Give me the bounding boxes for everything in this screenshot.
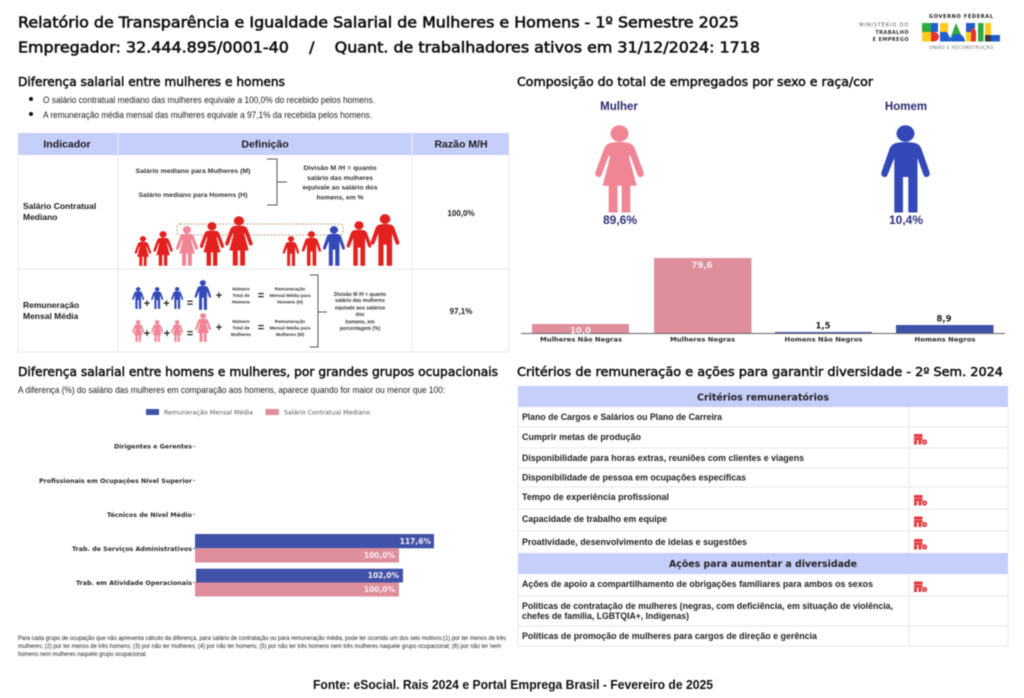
row: median definition text: homens, em %: [316, 196, 364, 202]
diversity rows: [522, 579, 893, 641]
row: mean definition text: Homens (H): [277, 300, 303, 304]
row: mean definition text: [231, 275, 386, 347]
row: mean pay label: Remuneração: [23, 300, 79, 310]
heading: occupational groups: Diferença salarial entre homens e mulheres, por grandes grupos ocupacionais: [18, 365, 498, 379]
criteria rows: Tempo de experiência profissional: [522, 492, 669, 502]
row: mean definition text: Mensal Média para: [270, 326, 311, 330]
criteria rows: Plano de Cargos e Salários ou Plano de Carreira: [522, 412, 723, 422]
row: median definition text: salário das mulheres: [307, 176, 374, 182]
row: median definition text: Salário mediano para Homens (H): [138, 193, 248, 199]
row: mean definition text: porcentagem (%): [340, 326, 381, 332]
footnote: homens nem mulheres naquele grupo ocupacional.: [18, 651, 147, 658]
bar chart: occupational groups: Trab. de Serviços Administrativos: [72, 545, 192, 553]
icons: mean formula: [132, 280, 264, 342]
row: mean definition text: salário das mulheres: [335, 298, 385, 304]
bar chart: occupational groups: 117,6%: [400, 537, 431, 546]
row: mean definition text: Remuneração: [275, 286, 305, 292]
row: mean definition text: Mulheres: [231, 332, 252, 337]
icons: mean formula: =: [187, 298, 193, 310]
row: mean definition text: Mulheres (M): [276, 332, 305, 337]
logo: ministry: TRABALHO: [875, 30, 909, 36]
source: Fonte: eSocial. Rais 2024 e Portal Emprega Brasil - Fevereiro de 2025: [313, 678, 713, 692]
bar chart: occupational groups: 100,0%: [364, 585, 395, 594]
bar chart: sex and race: 8,9: [936, 314, 952, 324]
icon: woman 89,6%: [595, 101, 644, 227]
criteria rows: Proatividade, desenvolvimento de ideias e sugestões: [522, 537, 747, 547]
icons: mean formula: =: [258, 322, 264, 334]
row: median salary label: Salário Contratual: [23, 201, 96, 211]
bar chart: sex and race: Homens Não Negros: [784, 336, 863, 344]
icons: mean formula: +: [216, 322, 222, 334]
bar chart: occupational groups: Profissionais em Ocupações Nível Superior: [39, 477, 193, 485]
row: median salary value: 100,0%: [447, 209, 475, 218]
bar chart: sex and race: 1,5: [815, 322, 831, 332]
bar chart: occupational groups: Técnicos de Nível Médio: [107, 511, 193, 519]
criteria rows: [522, 412, 804, 547]
icons: people ordered by salary: [135, 214, 399, 266]
bar chart: occupational groups: 102,0%: [368, 571, 399, 580]
logo: ministry: [859, 20, 909, 43]
logo: ministry: E EMPREGO: [873, 37, 909, 43]
row: mean definition text: dos: [356, 312, 365, 318]
icons: mean formula: +: [164, 328, 170, 340]
footnote: Para cada grupo de ocupação que não apresenta cálculo da diferença, para salário de contratação ou para remuneração média, pode ter ocorrido um dos seis motivos:(1) por ter menos de três: [18, 635, 506, 642]
heading: criteria: Critérios de remuneração e ações para garantir diversidade - 2º Sem. 2024: [517, 365, 1003, 379]
row: median salary label: Mediano: [23, 212, 57, 222]
row: mean definition text: equivale aos salários: [335, 306, 385, 312]
icons: criterion adopted: [914, 434, 926, 592]
legend: Remuneração Mensal Média: [164, 408, 253, 416]
bar chart: sex and race: Homens Negros: [914, 336, 976, 344]
icon: man 10,4%: 10,4%: [889, 213, 923, 227]
diversity rows: chefes de família, LGBTQIA+, Indígenas): [522, 611, 689, 621]
bar chart: sex and race: Mulheres Negras: [670, 336, 735, 344]
subheading: A diferença (%) do salário das mulheres em comparação aos homens, aparece quando for maior ou menor que 100:: [18, 385, 445, 396]
footnote: [18, 635, 506, 658]
header cells: Indicador: [43, 138, 91, 150]
bar chart: occupational groups: [39, 442, 434, 596]
bullets: A remuneração média mensal das mulheres equivale a 97,1% da recebida pelos homens.: [43, 110, 372, 121]
row: mean pay label: Mensal Média: [23, 311, 79, 321]
icon: woman 89,6%: Mulher: [600, 101, 638, 113]
icons: mean formula: +: [144, 298, 150, 310]
row: mean pay value: 97,1%: [450, 307, 472, 316]
bar chart: sex and race: Mulheres Não Negras: [540, 336, 622, 344]
bar chart: sex and race: [521, 258, 1005, 344]
icons: mean formula: =: [187, 328, 193, 340]
criteria rows: Disponibilidade de pessoa em ocupações específicas: [522, 472, 746, 482]
title: Relatório de Transparência e Igualdade Salarial de Mulheres e Homens - 1º Semestre 2025: [18, 14, 739, 32]
header: diversity actions: Ações para aumentar a diversidade: [669, 559, 857, 570]
diversity rows: Políticas de promoção de mulheres para cargos de direção e gerência: [522, 631, 818, 641]
icon: man 10,4%: Homem: [885, 101, 927, 113]
row: mean definition text: Homens: [232, 300, 251, 304]
legend: Salário Contratual Mediano: [284, 408, 370, 416]
header cells: Razão M/H: [434, 138, 488, 150]
bar chart: sex and race: 10,0: [570, 326, 591, 336]
row: mean definition text: Divisão M /H = quanto: [334, 292, 386, 298]
logo: governo federal brasil: UNIÃO E RECONSTRUÇÃO: [929, 44, 993, 51]
logo: governo federal brasil: GOVERNO FEDERAL: [929, 14, 994, 20]
header cells: Definição: [241, 138, 289, 150]
row: mean definition text: Número: [232, 319, 250, 324]
heading: composition: Composição do total de empregados por sexo e raça/cor: [517, 75, 873, 89]
row: mean definition text: Remuneração: [275, 319, 305, 324]
row: mean definition text: homens, em: [345, 320, 375, 326]
row: median definition text: equivale ao salário dos: [302, 186, 378, 192]
diversity rows: Ações de apoio a compartilhamento de obrigações familiares para ambos os sexos: [522, 579, 873, 589]
icons: mean formula: =: [258, 290, 264, 302]
icon: man 10,4%: [881, 101, 930, 227]
diversity rows: Políticas de contratação de mulheres (negras, com deficiência, em situação de violência,: [522, 601, 893, 611]
row: mean definition text: Mensal Média para: [270, 293, 311, 298]
row: mean definition text: Total de: [232, 293, 250, 298]
row: median definition text: [136, 159, 378, 205]
icon: woman 89,6%: 89,6%: [603, 213, 637, 227]
bar chart: occupational groups: 100,0%: [364, 551, 395, 560]
logo: governo federal brasil: [922, 14, 1000, 51]
employer line: Empregador: 32.444.895/0001-40 / Quant. de trabalhadores ativos em 31/12/2024: 1718: [18, 39, 760, 57]
criteria rows: Cumprir metas de produção: [522, 432, 641, 442]
row: median definition text: Divisão M /H = quanto: [304, 166, 377, 172]
criteria rows: Disponibilidade para horas extras, reuniões com clientes e viagens: [522, 453, 804, 463]
bullets: O salário contratual mediano das mulheres equivale a 100,0% do recebido pelos homens.: [43, 95, 375, 106]
table: indicators: [18, 133, 509, 352]
footnote: mulheres; (2) por ter menos de três homens; (3) por não ter mulheres; (4) por não ter homens; (5) por não ter três homens nem três mulheres naquele grupo ocupacional; (6) por não ter nem: [18, 643, 501, 650]
icons: mean formula: +: [144, 328, 150, 340]
heading: salary difference: Diferença salarial entre mulheres e homens: [18, 75, 285, 89]
bar chart: sex and race: 79,6: [692, 261, 713, 271]
bar chart: occupational groups: Dirigentes e Gerentes: [114, 442, 192, 450]
legend: [146, 408, 370, 416]
row: mean definition text: Número: [232, 286, 250, 292]
row: mean definition text: Total de: [232, 326, 250, 330]
table: criteria and actions: [518, 386, 1008, 646]
bar chart: occupational groups: Trab. em Atividade Operacionais: [76, 579, 192, 587]
icons: mean formula: +: [163, 298, 170, 310]
header: criteria: Critérios remuneratórios: [697, 392, 829, 404]
logo: ministry: MINISTÉRIO DO: [859, 20, 909, 28]
row: median definition text: Salário mediano para Mulheres (M): [136, 169, 250, 175]
header cells: [43, 138, 488, 150]
icons: mean formula: +: [216, 290, 222, 302]
bullets: [29, 95, 375, 121]
criteria rows: Capacidade de trabalho em equipe: [522, 514, 667, 524]
